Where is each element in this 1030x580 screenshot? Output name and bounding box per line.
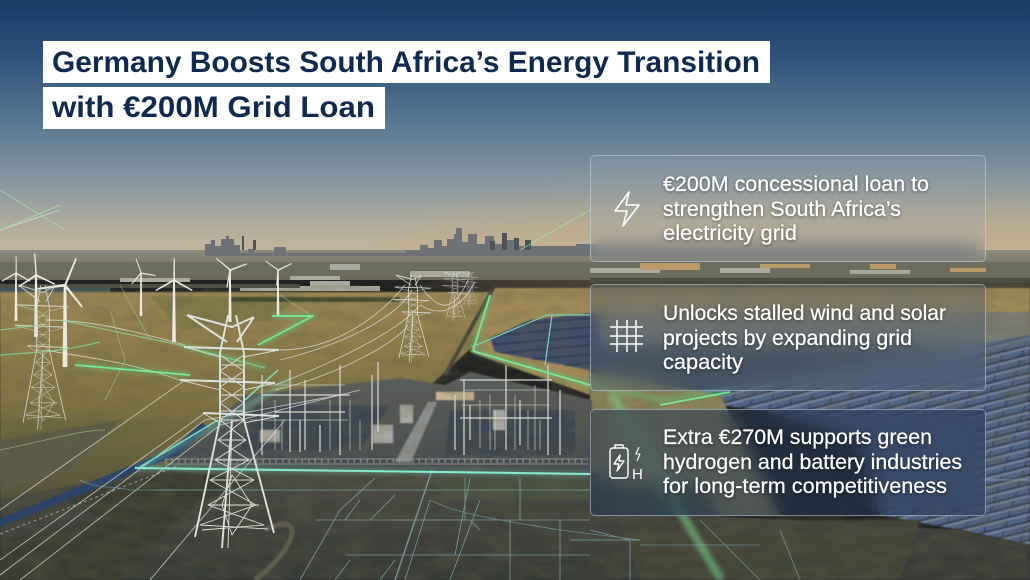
distant pylons (15, 272, 478, 429)
substation ground (165, 372, 592, 472)
distant city skyline (0, 228, 1030, 300)
foreground pylon (180, 315, 279, 548)
text: hydrogen description: for long-term competitiveness (663, 475, 947, 498)
substation structures (250, 362, 560, 455)
panel: hydrogen and battery (590, 409, 986, 516)
text: loan description: electricity grid (663, 222, 797, 245)
green energy lines (0, 190, 730, 580)
solar farm (490, 312, 1030, 545)
text: hydrogen description: Extra €270M supports green (663, 426, 932, 449)
text: projects description: capacity (663, 351, 744, 374)
white transmission lines (0, 210, 475, 580)
text: hydrogen description: hydrogen and battery industries (663, 451, 962, 474)
wind turbines (2, 246, 292, 367)
panel: concessional loan (590, 155, 986, 262)
panel: stalled projects (590, 284, 986, 391)
text: projects description: projects by expanding grid (663, 327, 912, 350)
circuit-style grid lines (80, 470, 1030, 580)
icon: lightning bolt (615, 192, 639, 226)
lower ground (0, 420, 1030, 580)
text: projects description (663, 302, 946, 374)
text: hydrogen description (663, 426, 962, 498)
sky (0, 0, 1030, 310)
title line 2: with €200M Grid Loan (51, 91, 375, 124)
text: projects description: Unlocks stalled wind and solar (663, 302, 946, 325)
text: loan description: strengthen South Africa’s (663, 198, 901, 221)
fence and service road (0, 425, 588, 534)
fields (0, 288, 1030, 500)
title line 1: Germany Boosts South Africa’s Energy Transition (52, 46, 760, 79)
text: loan description (663, 173, 929, 245)
ground texture (0, 285, 1030, 580)
icon: grid (610, 320, 643, 352)
text: loan description: €200M concessional loan to (663, 173, 929, 196)
icon: battery and hydrogen (610, 445, 643, 483)
icon: battery and hydrogen: H (632, 466, 643, 483)
